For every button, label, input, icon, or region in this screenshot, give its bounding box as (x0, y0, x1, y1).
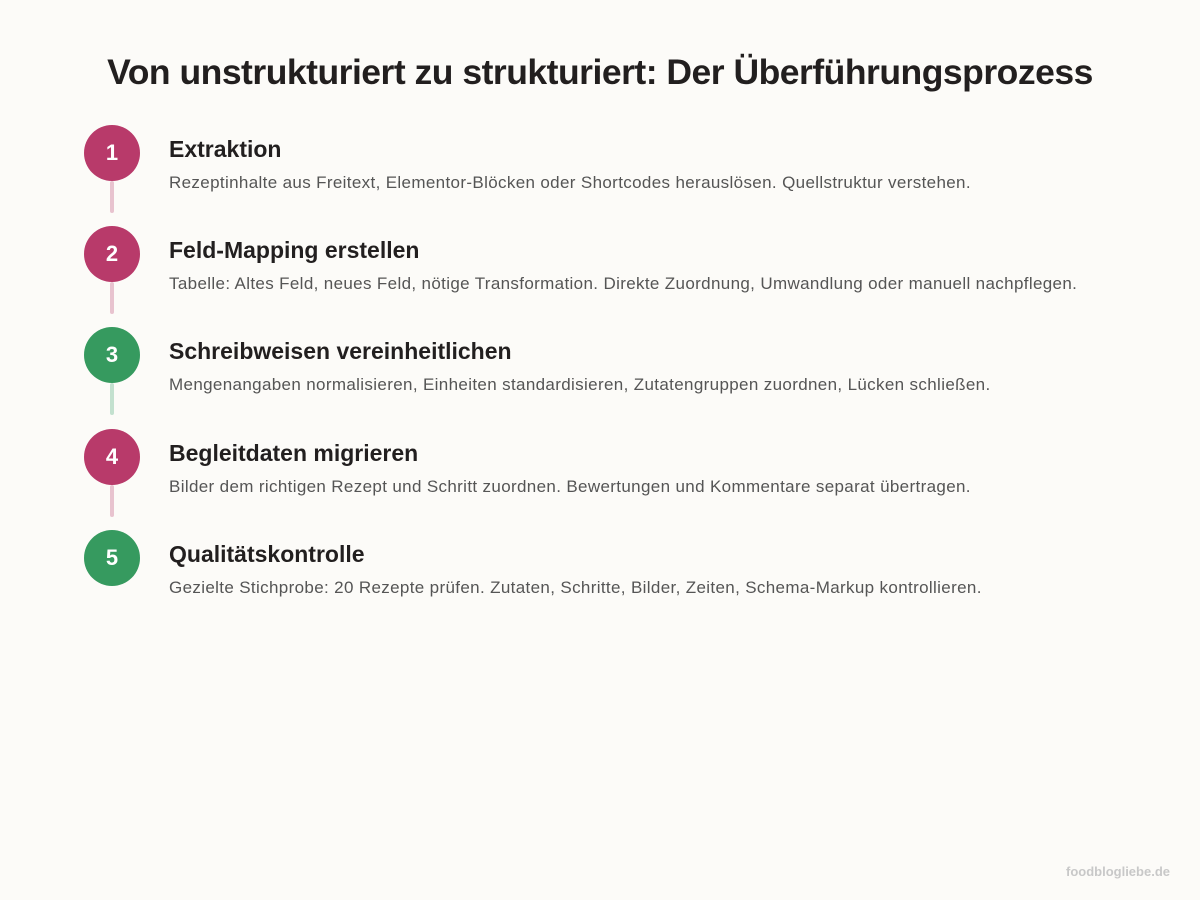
heading 5: Qualitätskontrolle (169, 541, 365, 567)
title: Von unstrukturiert zu strukturiert: Der Überführungsprozess (107, 52, 1093, 92)
badge 1 (84, 125, 140, 181)
heading 4: Begleitdaten migrieren (169, 440, 418, 466)
footer brand: foodblogliebe.de (1066, 864, 1170, 879)
badge 3 (84, 327, 140, 383)
step 4 (84, 429, 971, 517)
desc 3: Mengenangaben normalisieren, Einheiten standardisieren, Zutatengruppen zuordnen, Lücken schließen. (169, 375, 991, 394)
step 2 (84, 226, 1077, 314)
desc 1: Rezeptinhalte aus Freitext, Elementor-Blöcken oder Shortcodes herauslösen. Quellstruktur verstehen. (169, 173, 971, 192)
desc 2: Tabelle: Altes Feld, neues Feld, nötige Transformation. Direkte Zuordnung, Umwandlung oder manuell nachpflegen. (169, 274, 1077, 293)
badge 4 (84, 429, 140, 485)
badge 2 (84, 226, 140, 282)
badge 4: 4 (106, 444, 118, 469)
badge 5 (84, 530, 140, 586)
badge 5: 5 (106, 545, 118, 570)
badge 1: 1 (106, 140, 118, 165)
step 3 (84, 327, 991, 415)
badge 2: 2 (106, 241, 118, 266)
badge 3: 3 (106, 342, 118, 367)
step 5 (84, 530, 982, 597)
heading 3: Schreibweisen vereinheitlichen (169, 338, 512, 364)
heading 1: Extraktion (169, 136, 281, 162)
desc 5: Gezielte Stichprobe: 20 Rezepte prüfen. Zutaten, Schritte, Bilder, Zeiten, Schema-Markup kontrollieren. (169, 578, 982, 597)
step 1 (84, 125, 971, 213)
desc 4: Bilder dem richtigen Rezept und Schritt zuordnen. Bewertungen und Kommentare separat übertragen. (169, 477, 971, 496)
heading 2: Feld-Mapping erstellen (169, 237, 419, 263)
